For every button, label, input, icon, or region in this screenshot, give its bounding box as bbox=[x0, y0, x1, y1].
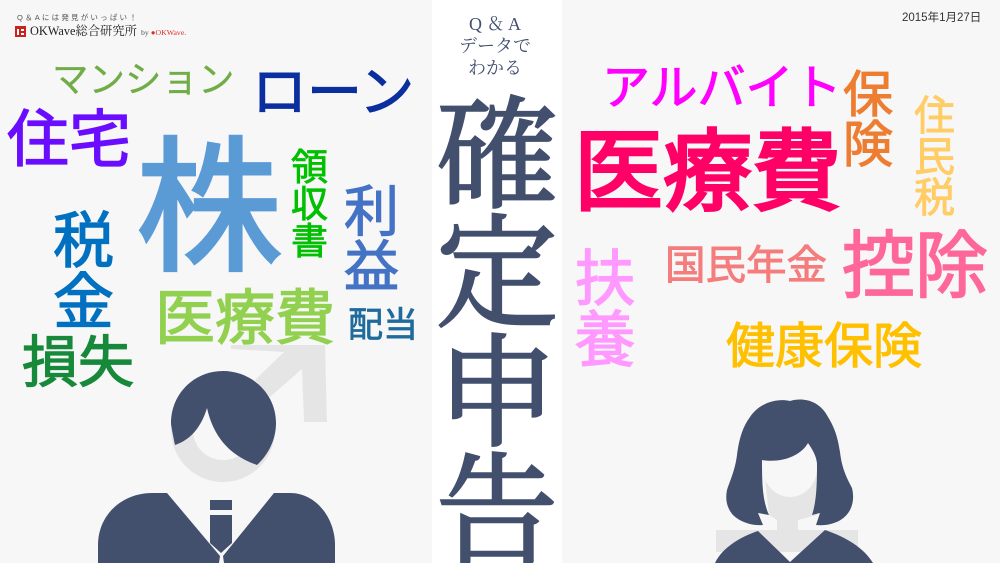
logo mark bbox=[15, 26, 26, 37]
logo name: OKWave総合研究所 bbox=[30, 24, 137, 38]
word: マンション: マンション bbox=[52, 59, 234, 100]
word: 医療費 right: 医療費 bbox=[574, 122, 841, 222]
word: 領収書: 領収書 bbox=[291, 147, 328, 262]
center main title: 申 bbox=[436, 328, 558, 463]
word: 税金: 税金 bbox=[53, 207, 114, 336]
word: 国民年金: 国民年金 bbox=[665, 242, 827, 288]
word: 利益: 利益 bbox=[344, 181, 399, 298]
word: 扶養: 扶養 bbox=[574, 245, 636, 374]
center column panel bbox=[432, 0, 562, 563]
logo tagline: Q＆Aには発見がいっぱい！ bbox=[17, 13, 139, 22]
word: アルバイト: アルバイト bbox=[602, 62, 842, 115]
word: 保険: 保険 bbox=[843, 67, 893, 173]
date: 2015年1月27日 bbox=[902, 12, 981, 24]
logo block bbox=[15, 13, 186, 38]
center small heading: データで bbox=[459, 36, 531, 56]
word: 損失: 損失 bbox=[22, 331, 134, 394]
word: 医療費 left: 医療費 bbox=[155, 285, 335, 352]
center main title: 確 bbox=[436, 90, 558, 225]
center main title bbox=[436, 90, 558, 563]
word: 控除: 控除 bbox=[842, 226, 988, 307]
center small heading: Q ＆ A bbox=[469, 14, 521, 34]
word: 住民税: 住民税 bbox=[914, 93, 955, 221]
center main title: 定 bbox=[436, 209, 558, 344]
center small heading: わかる bbox=[468, 58, 522, 78]
word: 住宅: 住宅 bbox=[7, 106, 131, 175]
word: 株: 株 bbox=[136, 127, 282, 290]
logo by OKWave: by ●OKWave. bbox=[141, 28, 186, 37]
word: 健康保険: 健康保険 bbox=[726, 320, 922, 374]
word: ローン: ローン bbox=[252, 61, 414, 123]
center small heading bbox=[459, 14, 531, 78]
word: 配当: 配当 bbox=[348, 306, 418, 345]
